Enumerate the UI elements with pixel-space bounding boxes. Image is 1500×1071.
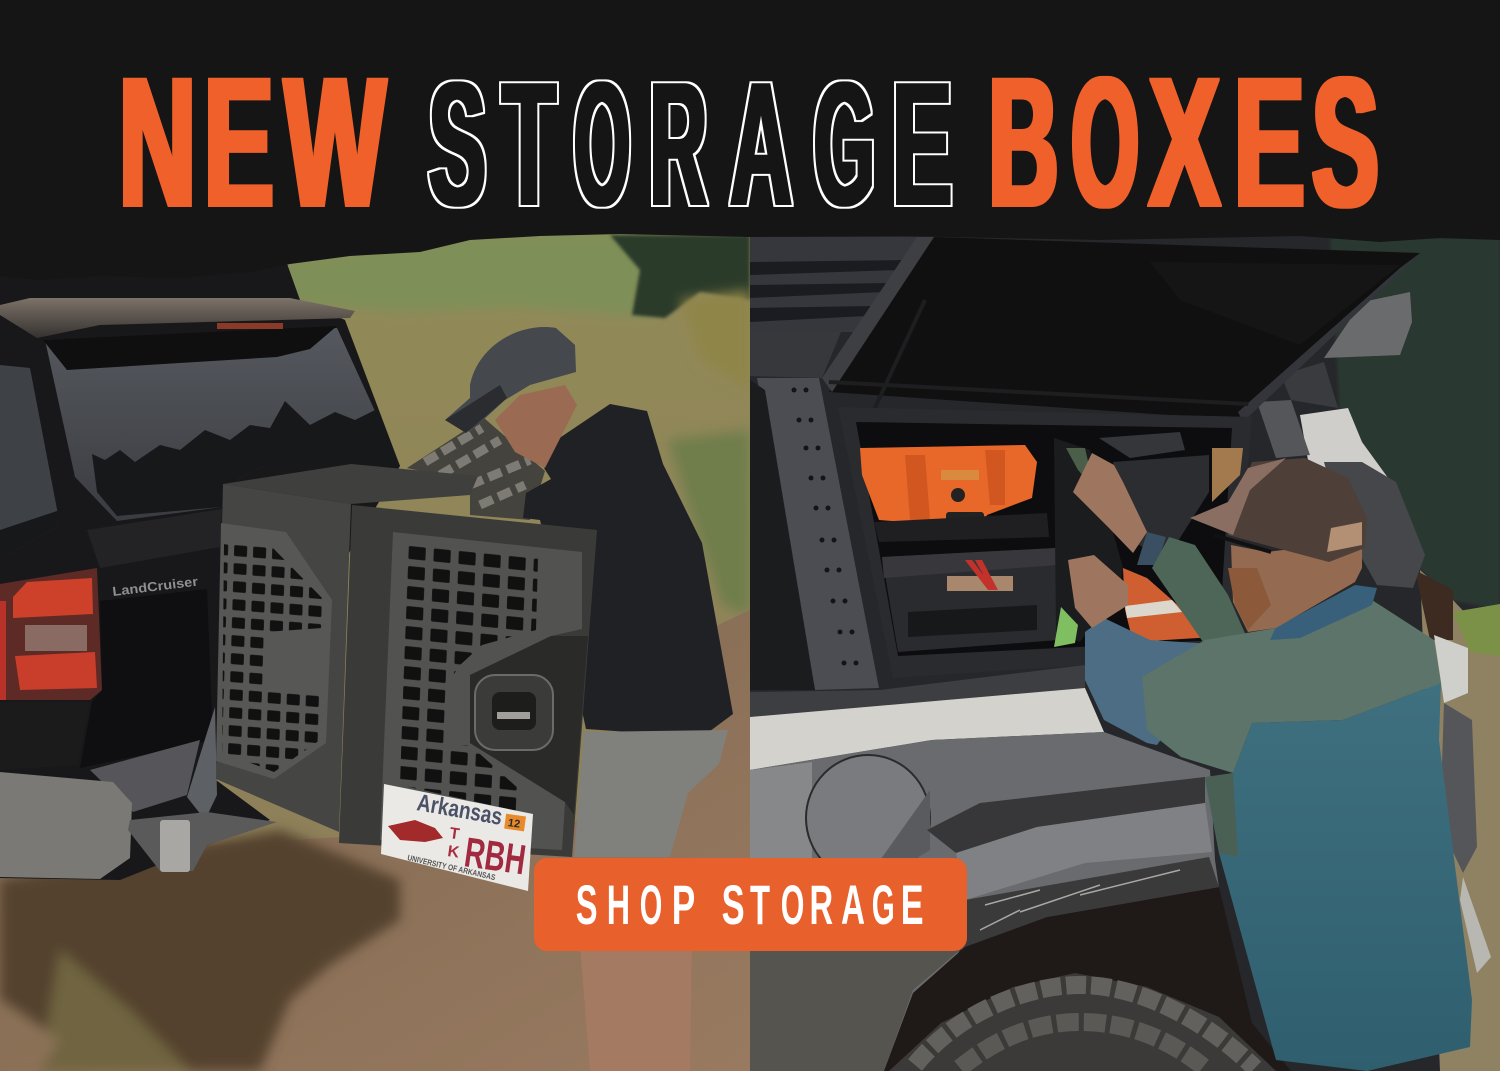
box top [223,464,478,504]
upper hand [1073,453,1147,553]
button: shop storage: P [672,873,695,936]
license plate: T [448,825,461,843]
recessed door panel [470,636,588,815]
button: shop storage: T [750,873,770,936]
title word: BOXES: O [1071,40,1139,246]
cap gap [1327,522,1362,552]
rear window [45,328,400,521]
license plate: UNIVERSITY OF ARKANSAS [407,853,497,882]
green tag [1054,607,1078,647]
side glass [0,365,60,559]
bumper [0,772,132,879]
mount plate [1281,362,1338,408]
tire [889,973,1276,1071]
truck right side [1434,635,1491,973]
box side face [216,484,351,832]
lower hand [1068,555,1128,628]
tail light [0,568,102,700]
rooftop tent case [1324,292,1412,358]
storage box [216,464,597,891]
green cloth [1066,448,1094,488]
license plate: K [446,843,461,862]
button: shop storage: O [781,873,804,936]
title [119,40,1379,246]
orange striped cone [1123,568,1214,642]
title word: BOXES: X [1149,40,1220,246]
face [495,385,577,468]
title word: BOXES: S [1312,40,1379,246]
light lower band [956,803,1212,900]
year sticker: 12 [507,817,521,831]
propane tank [1300,408,1396,520]
bracket plate [1324,462,1425,588]
hoodie [523,404,733,737]
blue sleeve [1085,618,1228,745]
cap crown [1228,458,1367,562]
license plate [381,784,533,891]
upper forearm sleeve [1137,532,1166,565]
light panel at left [750,762,812,860]
side panel [216,523,332,779]
button: shop storage: S [722,873,745,936]
body ridge [87,509,222,568]
vehicle rear [0,258,400,880]
orange case [860,445,1037,525]
button: shop storage: H [607,873,630,936]
green hillside [280,232,650,318]
cap [445,327,576,432]
shorts [574,730,728,857]
truck post with holes [757,378,879,690]
side dark gap [750,380,815,690]
cap camo front and bill [1190,458,1286,535]
ground right [1420,570,1500,1071]
side holes [222,542,322,772]
fender flare [960,857,1219,950]
button: shop storage: E [901,873,924,936]
button: shop storage: A [841,873,865,936]
title word: STORAGE outline: O [574,45,630,243]
title word: STORAGE outline: R [650,45,707,243]
button: shop storage: R [810,873,833,936]
collar [1270,585,1377,640]
year sticker [504,814,526,831]
fuel door [806,755,930,881]
strut [187,707,217,820]
dark band under spoiler [43,326,337,370]
title word: NEW: E [204,40,274,246]
glasses [1214,535,1271,552]
truck roof rack [750,237,934,378]
step [90,740,200,812]
door handle [475,675,553,750]
lower body [750,950,960,1071]
license plate: Arkansas [415,789,504,831]
door holes [400,540,538,812]
grass patch [668,290,750,615]
truck body panel [750,732,1235,1071]
storage compartment [838,407,1252,678]
tree background [1330,238,1500,610]
dark tree [610,235,750,318]
title word: STORAGE outline: T [502,45,556,243]
button: shop storage [534,858,967,951]
button: shop storage: G [872,873,895,936]
fleece green [1142,600,1441,773]
shrub [1453,604,1500,656]
title word: STORAGE outline: G [814,45,875,243]
torso teal [1205,683,1472,1071]
mount post [1257,400,1310,458]
black bag [882,548,1059,652]
roof spoiler [0,298,355,338]
lid [822,237,1420,440]
hanging black bag [1054,438,1123,642]
shelf [874,513,1049,542]
tree reflection in window [92,401,400,516]
shadow on ground [0,830,400,1071]
razorback logo [388,820,443,842]
dirt ground [0,610,750,1071]
title word: BOXES: B [988,40,1058,246]
license plate: RBH [462,828,529,883]
hitch [128,812,277,872]
man left [445,327,733,1071]
title word: STORAGE outline: A [730,45,792,243]
door grid plate [380,532,582,850]
sill [750,665,1085,718]
photo: right, man reaching into open truck box [750,230,1500,1071]
spare tire [407,418,545,520]
title word: NEW: W [284,40,386,246]
title word: BOXES: E [1234,40,1305,246]
white body band [750,688,1104,770]
man right [1068,453,1472,1071]
right gear [1099,432,1243,560]
emblem: LandCruiser [112,574,199,599]
title word: STORAGE outline: S [429,45,486,243]
title word: NEW: N [119,40,196,246]
button: shop storage: O [640,873,662,936]
brake light [217,323,283,329]
dark crease [927,777,1205,853]
beard [1228,568,1271,630]
torn black header [0,0,1500,280]
tailgate panel [80,589,213,768]
legs [580,945,692,1071]
wheel arch [884,887,1291,1071]
title word: STORAGE outline: E [892,45,952,243]
photo: left, man loading storage box on tailgate [0,230,750,1071]
box door [339,505,597,857]
head [1231,540,1362,632]
fleece arm [1152,537,1248,645]
lower green side [1205,773,1238,857]
button: shop storage: S [576,873,598,936]
